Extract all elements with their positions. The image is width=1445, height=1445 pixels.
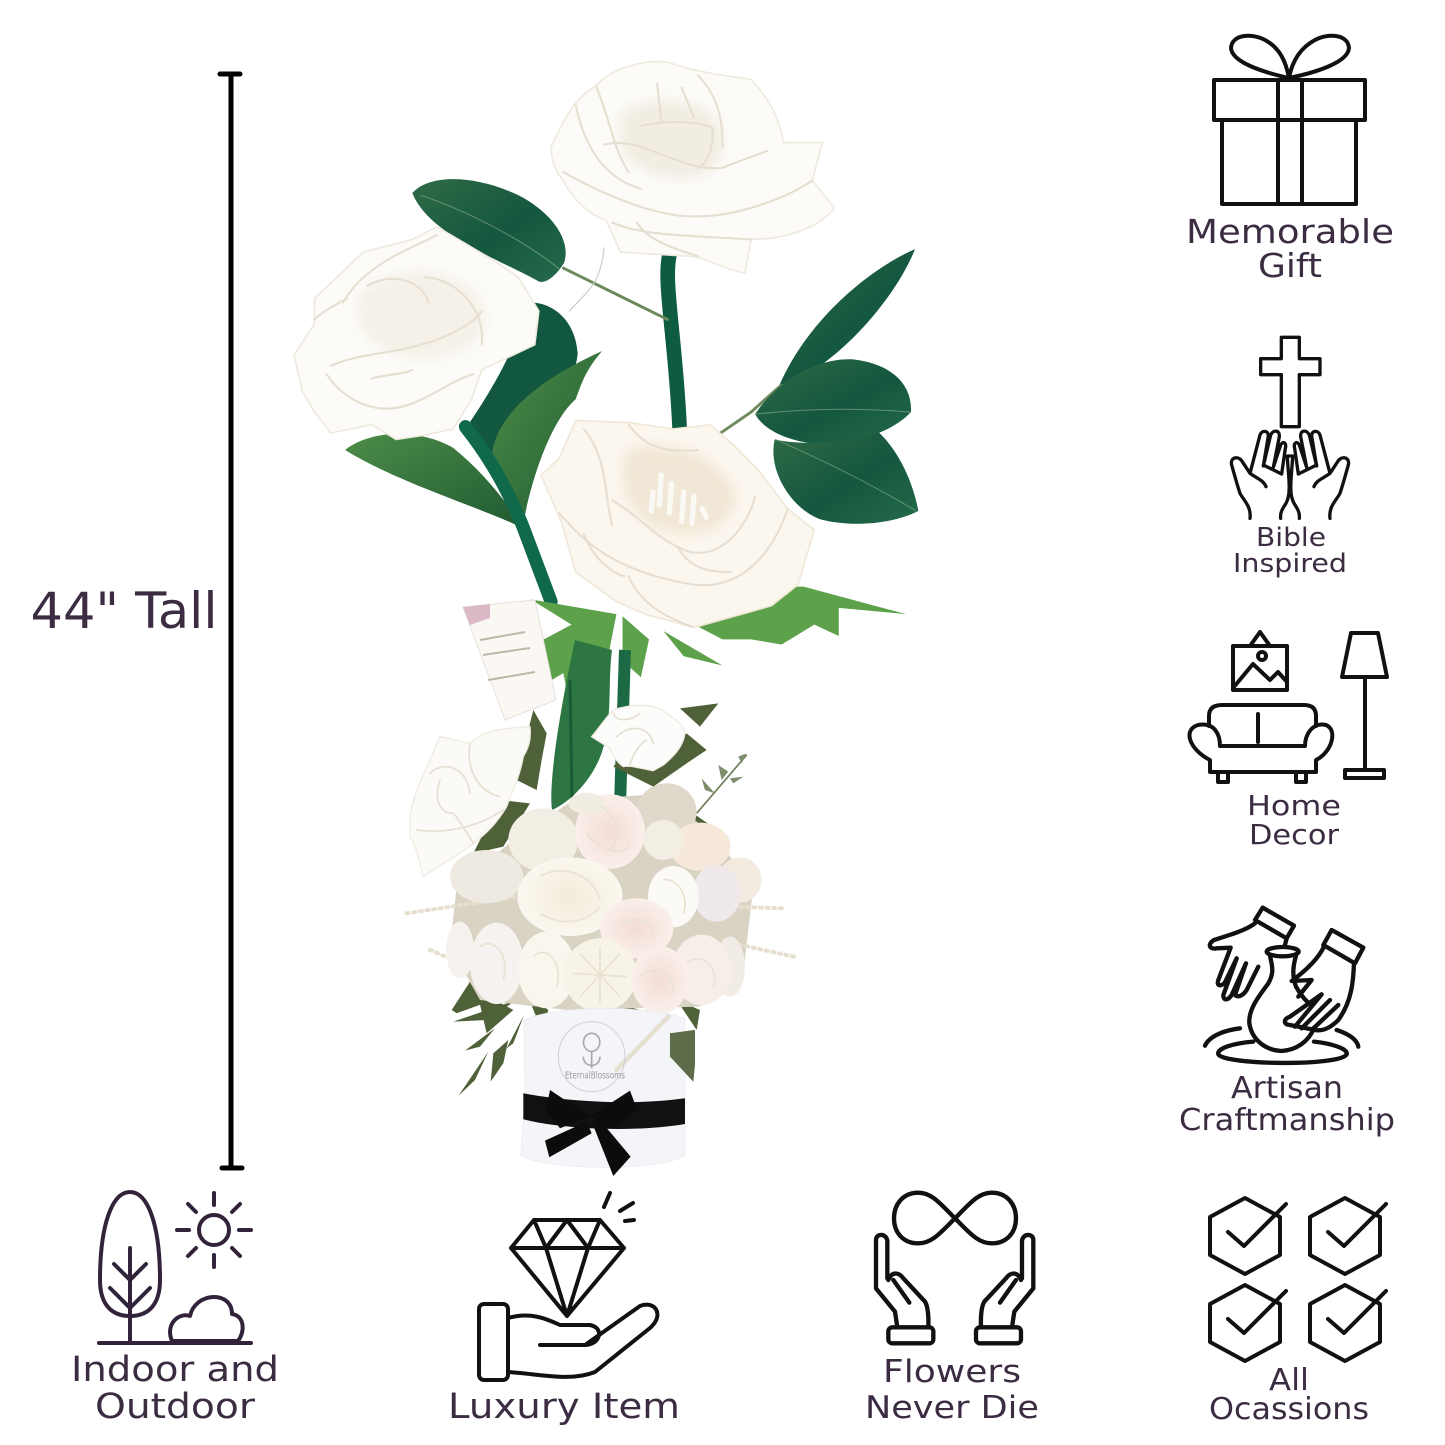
label: flowers never die xyxy=(865,1354,1039,1426)
label: home decor xyxy=(1247,789,1341,851)
label: flowers never die: Flowers xyxy=(883,1354,1021,1390)
label: bible inspired xyxy=(1233,523,1347,579)
base behind flowers xyxy=(450,793,753,1010)
greeting card xyxy=(463,600,556,720)
icon: infinity in hands xyxy=(876,1193,1033,1343)
label: luxury item: Luxury Item xyxy=(448,1387,680,1427)
icon: cross and praying hands xyxy=(1231,337,1349,518)
lower bouquet xyxy=(407,703,797,1176)
bow xyxy=(545,1090,637,1176)
bouquet blooms xyxy=(446,793,762,1014)
icon: diamond on hand xyxy=(479,1193,657,1380)
label: artisan craftmanship: Craftmanship xyxy=(1179,1103,1395,1138)
leaves: behind left peony xyxy=(345,302,602,602)
upper flowers and foliage xyxy=(294,62,918,707)
stamens xyxy=(651,475,706,524)
top rose xyxy=(551,62,835,273)
icon: tree, sun and bush xyxy=(99,1192,251,1343)
label: artisan craftmanship xyxy=(1179,1071,1395,1138)
label: indoor and outdoor xyxy=(71,1350,279,1427)
label: all ocassions: All xyxy=(1269,1363,1309,1398)
label: memorable gift: Memorable xyxy=(1186,212,1394,251)
label: home decor: Decor xyxy=(1249,818,1340,851)
left small rose xyxy=(410,727,530,877)
icon: checked hexagons xyxy=(1210,1198,1386,1361)
label: indoor and outdoor: Indoor and xyxy=(71,1350,279,1390)
label: memorable gift: Gift xyxy=(1258,246,1322,285)
label: bible inspired: Bible xyxy=(1256,523,1326,553)
label: indoor and outdoor: Outdoor xyxy=(95,1387,256,1427)
leaf: right two xyxy=(773,431,918,524)
ribbon xyxy=(523,1093,685,1129)
leaf: top xyxy=(412,179,566,282)
hatbox xyxy=(521,1009,685,1167)
icon: pottery hands xyxy=(1205,908,1363,1063)
lower stems and long leaves xyxy=(551,640,625,810)
stems and twigs xyxy=(563,248,782,437)
icon: gift xyxy=(1214,36,1365,204)
label: home decor: Home xyxy=(1247,789,1341,822)
foliage over box xyxy=(617,1017,695,1082)
leaf: right one xyxy=(755,359,911,444)
height ruler xyxy=(220,74,242,1168)
label: artisan craftmanship: Artisan xyxy=(1231,1071,1343,1106)
label: all ocassions: Ocassions xyxy=(1209,1392,1369,1427)
label: bible inspired: Inspired xyxy=(1233,549,1347,579)
right small rose xyxy=(592,705,685,771)
flower arrangement xyxy=(294,62,918,1176)
icon: sofa, picture and lamp xyxy=(1189,632,1387,782)
label: flowers never die: Never Die xyxy=(865,1390,1039,1426)
center peony xyxy=(541,420,814,628)
ferns xyxy=(504,587,906,707)
dried filler xyxy=(637,783,697,840)
left peony xyxy=(294,227,539,439)
label: memorable gift xyxy=(1186,212,1394,285)
box logo xyxy=(558,1022,625,1092)
leaf: upper right xyxy=(780,249,915,385)
box logo: EternalBlossoms xyxy=(565,1070,625,1081)
eucalyptus sprig xyxy=(697,753,747,813)
dried sprays xyxy=(407,897,797,960)
label: all ocassions xyxy=(1209,1363,1369,1427)
bouquet foliage xyxy=(452,703,727,1096)
height label: 44" Tall xyxy=(30,582,217,640)
